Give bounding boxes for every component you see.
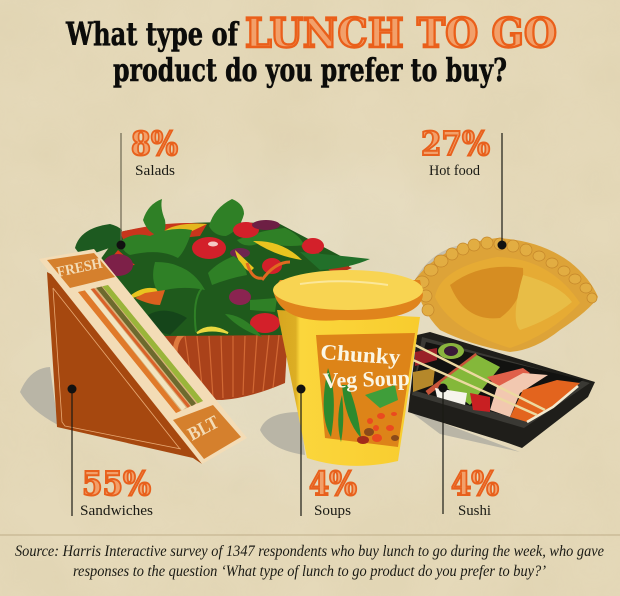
salad bowl: [75, 199, 370, 400]
stat: hot food: [421, 124, 490, 179]
stat: salads: Salads: [135, 163, 175, 179]
stat: salads: [131, 124, 178, 179]
stat: hot food: 27%: [421, 124, 490, 163]
stat: sushi: [451, 464, 499, 519]
title: LUNCH TO GO: [245, 10, 557, 57]
source note: responses to the question ‘What type of lunch to go product do you prefer to buy?’: [73, 563, 546, 580]
hot food pasty: [415, 237, 598, 352]
stat: sandwiches: [80, 464, 153, 519]
sushi callout line: [438, 384, 448, 514]
shadows: [20, 245, 520, 455]
sushi pieces: [413, 343, 580, 422]
sandwiches callout line: [68, 384, 76, 516]
sushi tray: [408, 332, 595, 448]
stat: soups: 4%: [309, 464, 357, 503]
label: fresh: FRESH: [56, 256, 104, 281]
soup label text: [320, 339, 410, 393]
sandwich pack: [39, 249, 247, 464]
source note: [15, 543, 604, 580]
label: fresh: [47, 253, 115, 288]
label: blt: BLT: [184, 412, 223, 445]
soup label text: Veg Soup: [322, 365, 410, 393]
stat: hot food: Hot food: [429, 163, 480, 179]
title: What type of: [65, 15, 240, 53]
salads callout line: [116, 133, 126, 250]
soups callout line: [296, 384, 306, 516]
hot food callout line: [498, 133, 506, 250]
soup label vegetables: [324, 368, 399, 444]
stat: sandwiches: Sandwiches: [80, 503, 153, 519]
soup cup: [273, 270, 423, 466]
callout lines: [68, 133, 506, 516]
stat: soups: [309, 464, 357, 519]
title: [65, 10, 557, 89]
stat: sushi: Sushi: [458, 503, 491, 519]
stat: salads: 8%: [131, 124, 178, 163]
soup label text: Chunky: [320, 339, 401, 370]
salad leaves and vegetables: [75, 199, 370, 337]
stat: sushi: 4%: [451, 464, 499, 503]
stat: soups: Soups: [314, 503, 351, 519]
window: [78, 284, 203, 413]
bowl: [163, 330, 288, 400]
chopsticks: [413, 345, 545, 415]
label: blt: [173, 405, 241, 459]
stat: sandwiches: 55%: [82, 464, 151, 503]
